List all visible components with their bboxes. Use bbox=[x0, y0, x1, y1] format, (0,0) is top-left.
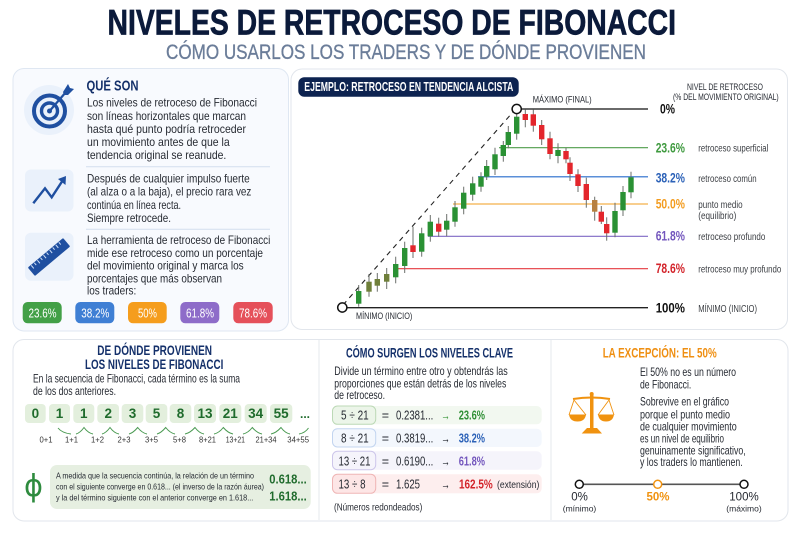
ratio row: 13/21: = bbox=[382, 454, 389, 468]
ratio row: 13/21 bbox=[332, 451, 542, 470]
level percentages: 100% bbox=[656, 299, 685, 315]
level percentages: 0% bbox=[660, 100, 675, 116]
sum labels: 2+3 bbox=[118, 435, 131, 444]
text block: divide: de retroceso. bbox=[334, 388, 385, 402]
callout: convergence: 1.618... bbox=[269, 489, 307, 504]
sum labels: 5+8 bbox=[173, 435, 187, 444]
ratio row: 8/21: 8 ÷ 21 bbox=[341, 432, 369, 446]
heading: how levels arise: CÓMO SURGEN LOS NIVELES CLAVE bbox=[346, 344, 513, 361]
legend heading bbox=[673, 82, 779, 103]
level percentages: 61.8% bbox=[656, 228, 685, 244]
text block: 50 percent: genuinamente significativo, bbox=[640, 443, 746, 457]
sum labels: 0+1 bbox=[40, 435, 53, 444]
text block: divide bbox=[334, 364, 508, 402]
candlestick chart bbox=[356, 109, 634, 307]
callout: convergence bbox=[50, 465, 311, 509]
ratio row: 13/21: 0.6190... bbox=[396, 454, 433, 468]
callout: convergence: 0.618... bbox=[269, 471, 307, 486]
marker: high point bbox=[512, 104, 521, 114]
text block: definition: Los niveles de retroceso de Fibonacci bbox=[87, 96, 257, 110]
text block: impulse: (al alza o a la baja), el precio rara vez bbox=[87, 185, 251, 199]
level percentages: 38.2% bbox=[656, 169, 685, 185]
ratio row: 13/8: = bbox=[382, 478, 389, 492]
level descriptions: retroceso común bbox=[698, 174, 757, 185]
fibonacci sequence boxes: 13 bbox=[197, 406, 213, 421]
fibonacci sequence boxes: 55 bbox=[274, 406, 289, 421]
fibonacci sequence boxes: 3 bbox=[129, 406, 137, 421]
label: high: MÁXIMO (FINAL) bbox=[533, 95, 592, 106]
level descriptions: (equilibrio) bbox=[698, 211, 736, 222]
scale 0 to 100: (mínimo) bbox=[563, 504, 596, 514]
text block: 50 percent: es un nivel de equilibrio bbox=[640, 431, 724, 445]
level percentages bbox=[656, 100, 685, 315]
text block: 50 percent bbox=[640, 365, 746, 469]
ratio row: 5/21: = bbox=[382, 408, 389, 422]
ratio row: 8/21: → bbox=[441, 430, 450, 446]
ratio row: 13/8 bbox=[332, 474, 542, 493]
sum labels: 34+55 bbox=[287, 435, 310, 444]
panel: la excepción bbox=[563, 344, 762, 514]
text block: tool: La herramienta de retroceso de Fibonacci bbox=[87, 233, 270, 247]
scale 0 to 100 bbox=[563, 480, 762, 514]
sum labels: 3+5 bbox=[145, 435, 159, 444]
icon: ruler bbox=[25, 233, 74, 281]
text block: 50 percent: de Fibonacci. bbox=[640, 377, 691, 391]
subtitle: CÓMO USARLOS LOS TRADERS Y DE DÓNDE PROVIENEN bbox=[166, 41, 646, 64]
retracement level lines bbox=[342, 109, 648, 308]
fibonacci sequence boxes: 2 bbox=[104, 406, 112, 421]
text block: impulse: Después de cualquier impulso fuerte bbox=[87, 172, 250, 186]
ratio row: 5/21: 5 ÷ 21 bbox=[341, 408, 369, 422]
text block: definition: son líneas horizontales que marcan bbox=[87, 109, 246, 123]
text block: 50 percent: y los traders lo mantienen. bbox=[640, 455, 743, 469]
icon: target with arrow bbox=[24, 84, 74, 135]
icon: rising trend arrow bbox=[25, 170, 74, 212]
badge: example heading: EJEMPLO: RETROCESO EN TENDENCIA ALCISTA bbox=[304, 80, 513, 94]
text block: 50 percent: El 50% no es un número bbox=[640, 365, 736, 379]
fibonacci sequence boxes: 21 bbox=[223, 406, 238, 421]
heading: origin: DE DÓNDE PROVIENEN bbox=[97, 341, 212, 358]
percentage pills: 78.6% bbox=[239, 306, 267, 320]
text block: divide: Divide un término entre otro y obtendrás las bbox=[334, 364, 508, 378]
ratio row: 13/21: 61.8% bbox=[459, 454, 485, 468]
fibonacci sequence boxes: 1 bbox=[56, 406, 64, 421]
ratio row: 13/21: 13 ÷ 21 bbox=[338, 454, 371, 468]
panel: ejemplo chart bbox=[291, 69, 788, 330]
ratio row: 8/21 bbox=[332, 429, 542, 447]
scale 0 to 100: 0% bbox=[571, 492, 588, 504]
percentage pills: 23.6% bbox=[28, 306, 57, 320]
fibonacci sequence boxes: 8 bbox=[177, 406, 185, 421]
callout: convergence: con el siguiente converge en 0.618... (el inverso de la razón áurea) bbox=[56, 482, 264, 492]
sum labels: 13+21 bbox=[226, 435, 245, 444]
ratio row: 13/8: → bbox=[441, 476, 450, 492]
sum labels bbox=[40, 435, 310, 444]
sum arcs bbox=[58, 428, 308, 434]
ratio row: 13/8: 13 ÷ 8 bbox=[338, 478, 366, 492]
ratio row: 5/21: 23.6% bbox=[459, 408, 485, 422]
label: low: MÍNIMO (INICIO) bbox=[356, 311, 412, 322]
text block: 50 percent: porque el punto medio bbox=[640, 407, 730, 421]
ratio row: 8/21: 0.3819... bbox=[396, 432, 433, 446]
ratio row: 5/21: 0.2381... bbox=[396, 408, 433, 422]
ratio row: 13/8: 162.5% bbox=[459, 476, 493, 492]
heading: origin: LOS NIVELES DE FIBONACCI bbox=[85, 356, 223, 372]
scale 0 to 100: 50% bbox=[646, 492, 670, 504]
text block: definition: un movimiento antes de que la bbox=[87, 135, 230, 149]
level descriptions: retroceso profundo bbox=[698, 232, 766, 243]
text block: sequence intro: En la secuencia de Fibonacci, cada término es la suma bbox=[33, 372, 240, 386]
dashed trend line bbox=[343, 112, 513, 305]
icon: phi: ϕ bbox=[24, 469, 43, 504]
panel: qué son bbox=[13, 68, 288, 331]
badge: example heading bbox=[298, 77, 519, 97]
ratio row: 13/8: (extensión) bbox=[497, 479, 539, 491]
ratio row: 8/21: = bbox=[382, 432, 389, 446]
fibonacci sequence boxes: 0 bbox=[32, 406, 39, 421]
percentage pills: 50% bbox=[138, 306, 157, 320]
text block: definition bbox=[87, 96, 257, 162]
panel: cómo surgen bbox=[332, 344, 542, 514]
sum labels: 1+1 bbox=[65, 435, 79, 444]
level descriptions bbox=[698, 144, 782, 315]
title: NIVELES DE RETROCESO DE FIBONACCI bbox=[108, 4, 676, 42]
fibonacci sequence boxes: 1 bbox=[80, 406, 88, 421]
text block: impulse: continúa en línea recta. bbox=[87, 198, 181, 212]
heading: qué son: QUÉ SON bbox=[86, 78, 138, 94]
text block: impulse bbox=[87, 172, 251, 225]
text block: definition: hasta qué punto podría retroceder bbox=[87, 122, 246, 136]
text block: 50 percent: Sobrevive en el gráfico bbox=[640, 395, 729, 409]
level descriptions: punto medio bbox=[698, 200, 743, 211]
sum labels: 1+2 bbox=[91, 435, 105, 444]
ratio row: 8/21: 38.2% bbox=[459, 432, 485, 446]
level descriptions: MÍNIMO (INICIO) bbox=[698, 302, 757, 315]
legend heading: NIVEL DE RETROCESO bbox=[687, 82, 763, 93]
level percentages: 23.6% bbox=[656, 139, 685, 155]
text block: tool bbox=[87, 233, 270, 298]
text block: tool: mide ese retroceso como un porcentaje bbox=[87, 246, 263, 260]
ratio row: 5/21: → bbox=[441, 407, 450, 423]
text block: tool: del movimiento original y marca los bbox=[87, 259, 244, 273]
text block: divide: proporciones que están detrás de los niveles bbox=[334, 376, 506, 390]
level descriptions: retroceso superficial bbox=[698, 144, 768, 155]
text block: sequence intro: de los dos anteriores. bbox=[33, 384, 116, 398]
percentage pills bbox=[23, 302, 273, 323]
percentage pills: 61.8% bbox=[186, 306, 214, 320]
level percentages: 78.6% bbox=[656, 260, 685, 276]
callout: convergence: y la del término siguiente con el anterior converge en 1.618... bbox=[56, 493, 253, 503]
text block: sequence intro bbox=[33, 372, 240, 398]
callout: convergence: A medida que la secuencia continúa, la relación de un término bbox=[56, 471, 254, 481]
text block: tool: porcentajes que más observan bbox=[87, 271, 222, 285]
heading: exception: LA EXCEPCIÓN: EL 50% bbox=[603, 344, 717, 361]
icon: balance scales bbox=[569, 392, 614, 434]
note: rounded numbers: (Números redondeados) bbox=[334, 503, 422, 514]
ratio row: 13/21: → bbox=[441, 453, 450, 469]
level percentages: 50.0% bbox=[656, 196, 685, 212]
panel: bottom container bbox=[13, 340, 788, 521]
sum labels: 8+21 bbox=[199, 435, 217, 444]
text block: definition: tendencia original se reanude. bbox=[87, 148, 226, 162]
ratio row: 5/21 bbox=[332, 406, 542, 424]
text block: tool: los traders: bbox=[87, 284, 136, 298]
heading: origin bbox=[85, 341, 223, 372]
sum labels: 21+34 bbox=[256, 435, 277, 444]
fibonacci sequence boxes: 34 bbox=[248, 406, 264, 421]
text block: 50 percent: de cualquier movimiento bbox=[640, 419, 737, 433]
percentage pills: 38.2% bbox=[81, 306, 110, 320]
scale 0 to 100: (máximo) bbox=[726, 504, 762, 514]
fibonacci sequence boxes bbox=[25, 404, 310, 423]
scale 0 to 100: 100% bbox=[729, 492, 759, 504]
text block: impulse: Siempre retrocede. bbox=[87, 211, 171, 225]
fibonacci sequence boxes: ... bbox=[300, 407, 310, 421]
ratio row: 13/8: 1.625 bbox=[396, 478, 420, 492]
fibonacci sequence boxes: 5 bbox=[153, 406, 161, 421]
panel: de dónde provienen bbox=[24, 341, 311, 509]
marker: low point bbox=[338, 303, 347, 312]
